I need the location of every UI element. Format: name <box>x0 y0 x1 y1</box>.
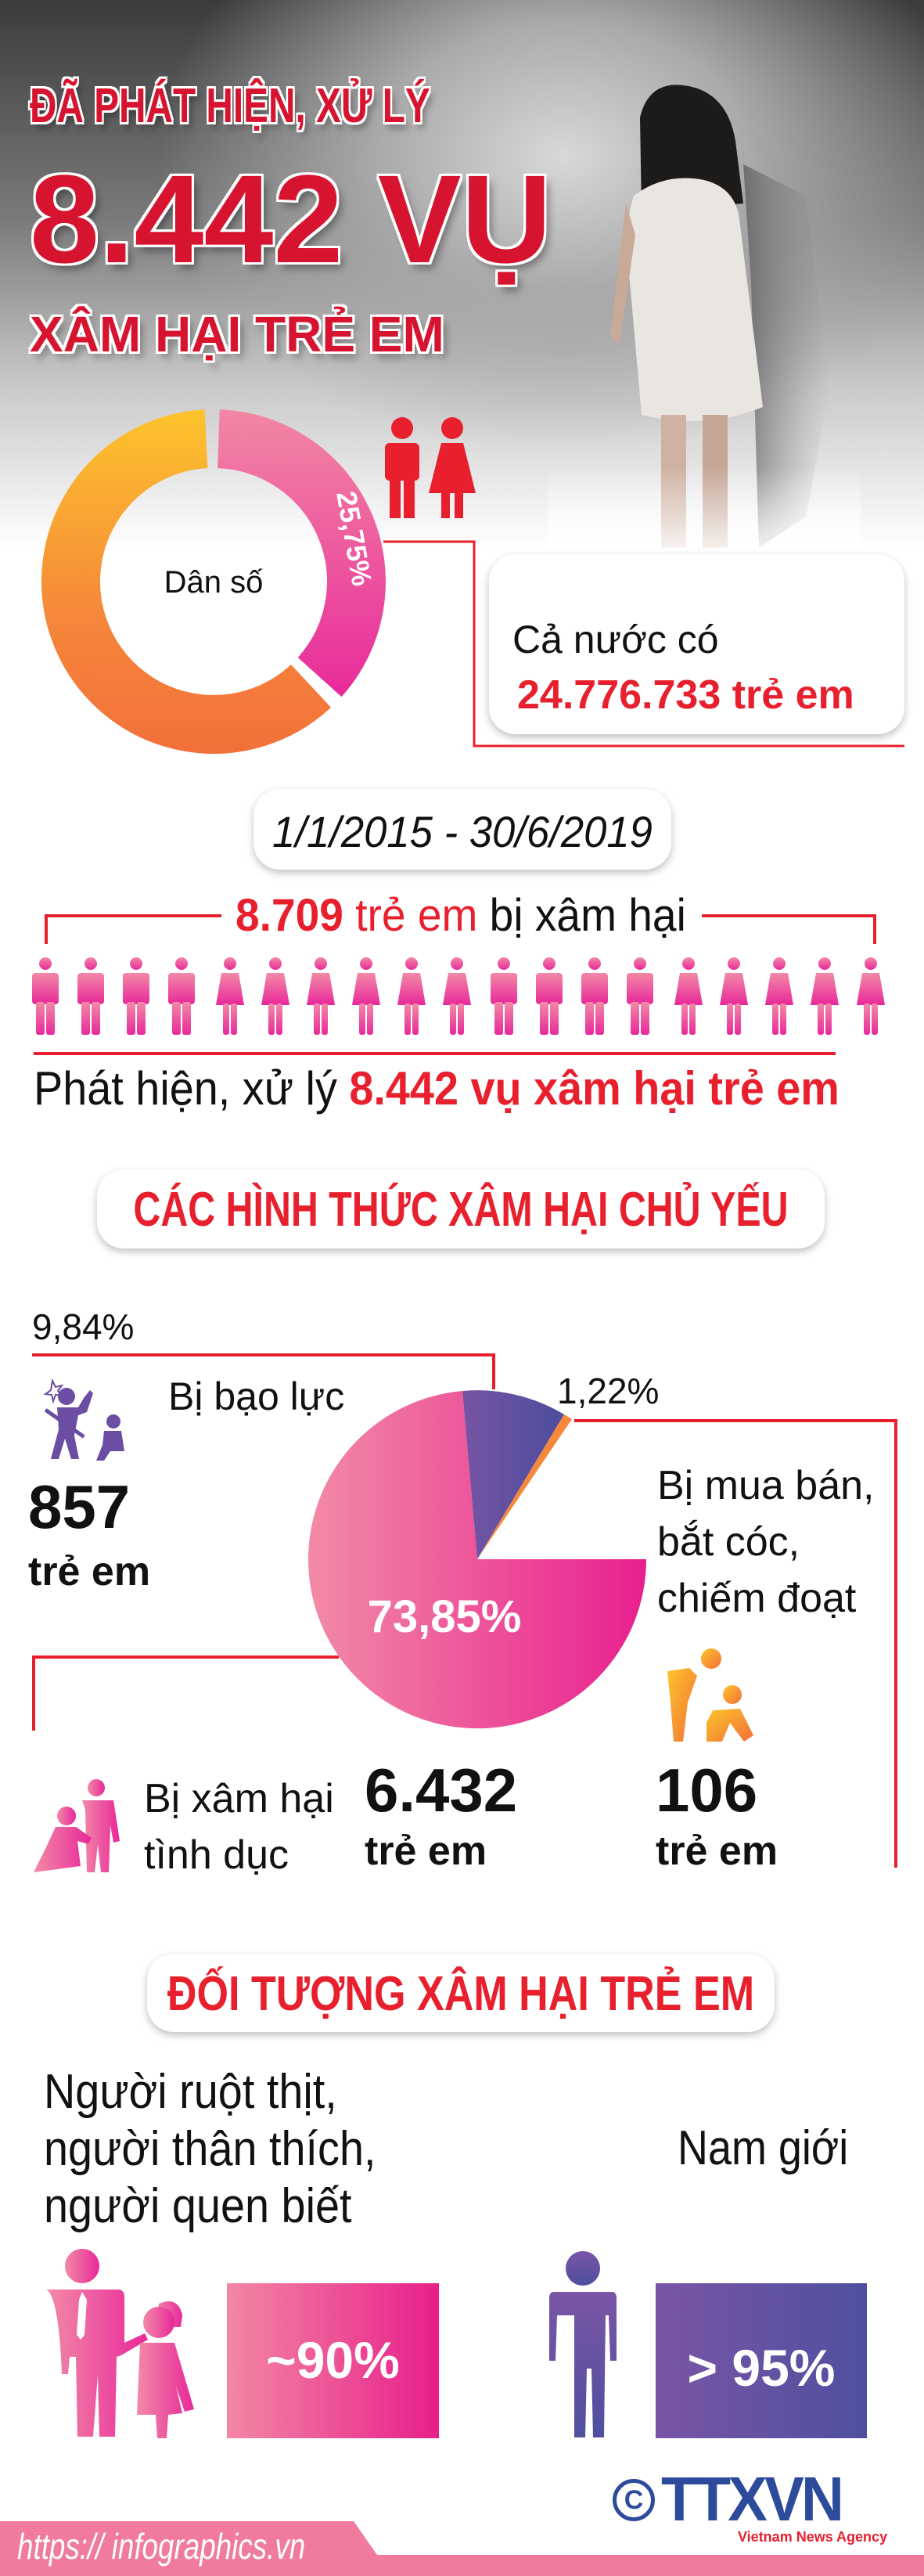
text: trafficking: bắt cóc, <box>657 1519 800 1565</box>
text: https:// infographics.vn <box>17 2526 305 2567</box>
stat box: >95%: > 95% <box>687 2339 835 2397</box>
divider red <box>34 1052 836 1055</box>
image: girl facing wall <box>610 85 818 548</box>
background: dark gradient header <box>0 0 924 548</box>
pie: sexual abuse slice <box>308 1391 646 1728</box>
icon: trafficking <box>667 1648 753 1742</box>
bracket line <box>45 914 876 944</box>
text: sexual abuse: tình dục <box>144 1832 289 1878</box>
heading box: main forms: CÁC HÌNH THỨC XÂM HẠI CHỦ YẾU <box>133 1183 789 1237</box>
pie: violence slice <box>462 1390 564 1559</box>
icon: boy and girl <box>385 417 476 518</box>
stat: 857: 857 <box>28 1472 130 1541</box>
text: sexual abuse: Bị xâm hại <box>144 1776 334 1821</box>
connector line <box>383 540 904 747</box>
text: relatives: người quen biết <box>44 2179 352 2233</box>
text: trafficking: chiếm đoạt <box>657 1576 856 1621</box>
text: relatives: Người ruột thịt, <box>44 2065 337 2119</box>
label 9,84%: 9,84% <box>32 1306 134 1347</box>
text: violence: Bị bạo lực <box>168 1374 344 1418</box>
heading box: perpetrators <box>147 1954 775 2032</box>
text: relatives: người thân thích, <box>44 2122 376 2176</box>
pie: trafficking slice <box>477 1414 572 1559</box>
pie label: 73,85% <box>368 1591 521 1642</box>
text: trẻ em <box>365 1828 487 1874</box>
text: relatives <box>44 2065 376 2233</box>
heading box: perpetrators: ĐỐI TƯỢNG XÂM HẠI TRẺ EM <box>167 1967 754 2021</box>
logo: TTXVN: TTXVN <box>661 2464 841 2534</box>
date box: 1/1/2015 - 30/6/2019 <box>272 807 653 856</box>
title line 3: XÂM HẠI TRẺ EM <box>30 306 444 362</box>
people row icons <box>32 957 885 1035</box>
stat box: >95% <box>656 2283 867 2438</box>
donut label: Dân số <box>164 565 263 600</box>
stat: 106: 106 <box>656 1756 757 1825</box>
stat: 6.432: 6.432 <box>365 1756 517 1825</box>
callout: total children: 24.776.733 trẻ em <box>517 672 854 718</box>
label 1,22%: 1,22% <box>557 1371 659 1411</box>
donut: rest segment <box>71 439 311 724</box>
logo: TTXVN: C <box>624 2485 643 2515</box>
callout: total children: Cả nước có <box>512 618 719 661</box>
icon: sexual abuse <box>34 1779 120 1872</box>
title block <box>28 76 554 369</box>
donut chart: population <box>41 409 386 755</box>
stat box: ~90% <box>227 2283 439 2438</box>
percent label: 25,75% <box>330 488 379 589</box>
title big number: 8.442 VỤ <box>30 149 552 289</box>
text: trafficking: Bị mua bán, <box>657 1463 875 1508</box>
text: trẻ em <box>656 1828 778 1874</box>
icon: violence <box>44 1378 124 1461</box>
date box <box>253 789 671 870</box>
logo: TTXVN <box>613 2464 887 2545</box>
title line 1: ĐÃ PHÁT HIỆN, XỬ LÝ <box>30 79 430 133</box>
footer band with url <box>0 2521 924 2576</box>
heading box: main forms <box>97 1169 825 1248</box>
icon: man and girl <box>46 2249 194 2438</box>
connector lines for pie <box>32 1353 897 1868</box>
stat box: ~90%: ~90% <box>266 2331 400 2389</box>
callout: total children <box>489 554 904 734</box>
text: trẻ em <box>28 1549 150 1594</box>
icon: man <box>549 2251 617 2437</box>
text: cases handled: Phát hiện, xử lý 8.442 vụ xâm hại trẻ em <box>34 1062 840 1115</box>
text: trafficking <box>657 1463 875 1621</box>
heading: victims: 8.709 trẻ em bị xâm hại <box>235 890 686 941</box>
logo: TTXVN: Vietnam News Agency <box>738 2529 887 2545</box>
text: sexual abuse <box>144 1776 334 1878</box>
donut: children segment <box>218 439 356 677</box>
pie chart: forms of abuse <box>308 1390 646 1728</box>
text: male: Nam giới <box>678 2121 848 2175</box>
